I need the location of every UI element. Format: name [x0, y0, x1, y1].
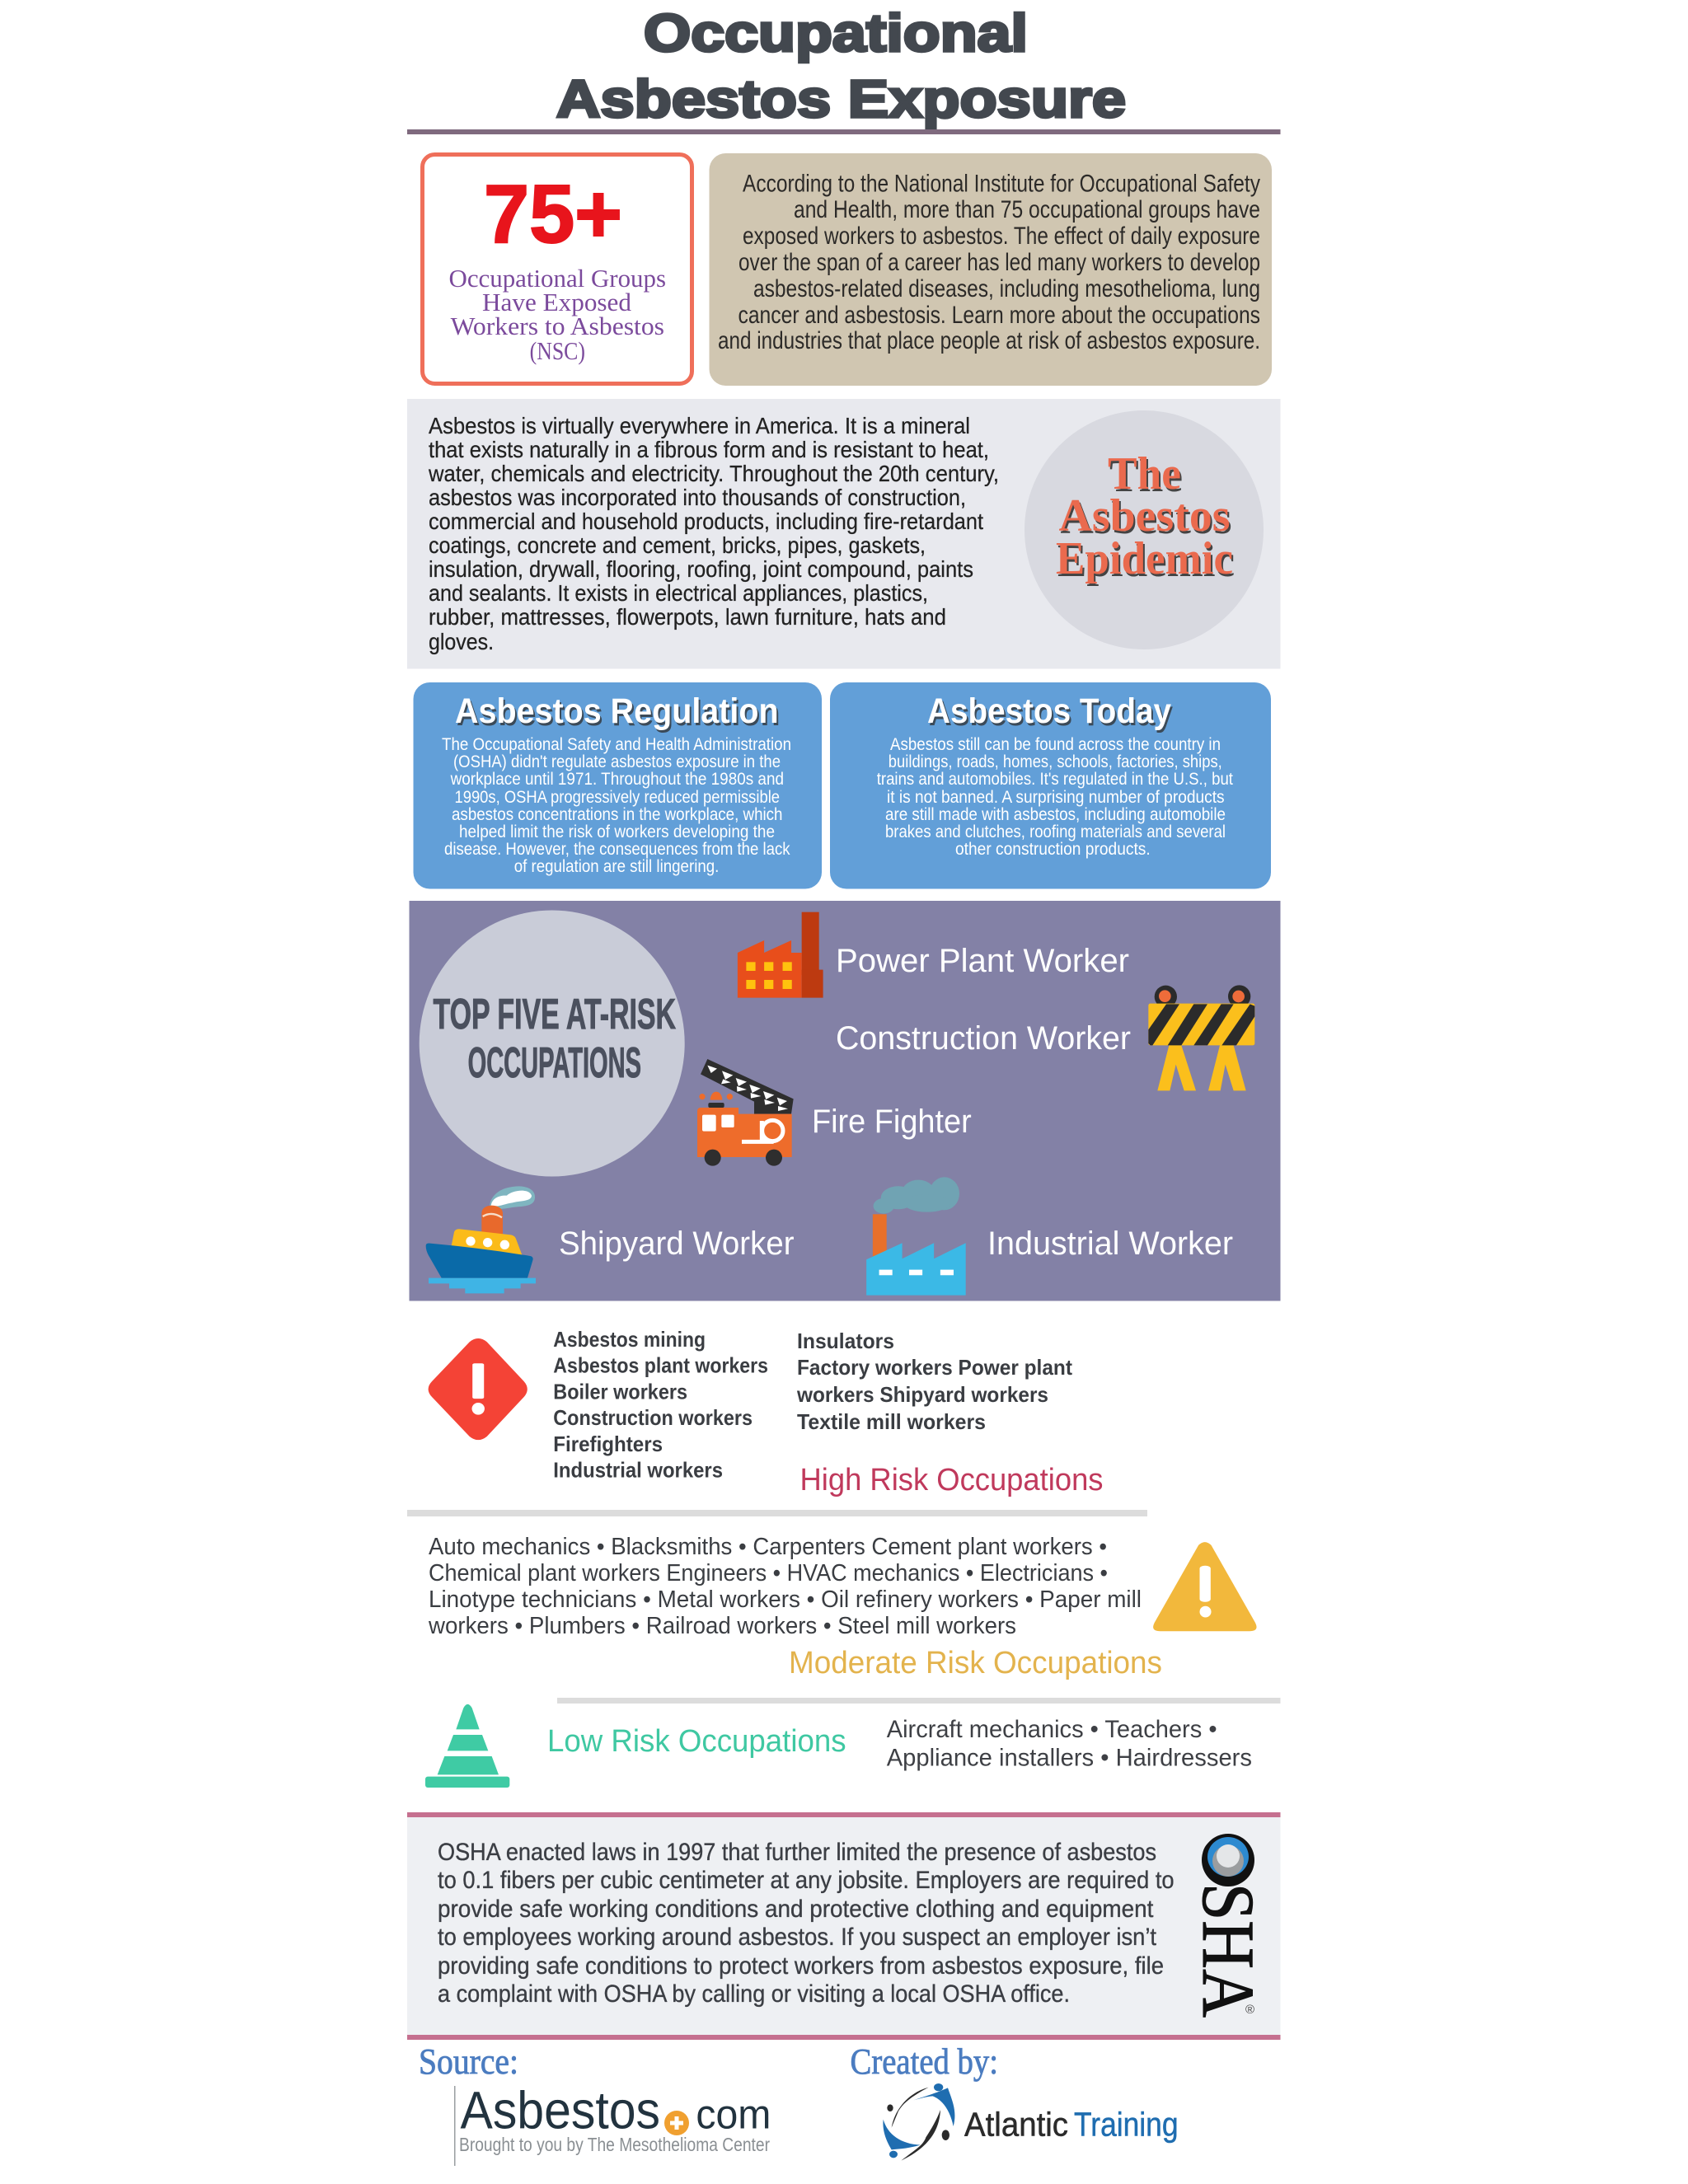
today heading: Asbestos Today	[927, 691, 1171, 731]
moderate risk heading: Moderate Risk Occupations	[789, 1646, 1162, 1680]
panel: intro text: asbestos-related diseases, including mesothelioma, lung	[753, 275, 1260, 302]
panel: intro text: and industries that place people at risk of asbestos exposure.	[718, 327, 1260, 354]
moderate risk list: Linotype technicians • Metal workers • Oil refinery workers • Paper mill	[429, 1586, 1142, 1613]
icon: power plant factory	[738, 912, 823, 998]
high risk list, left column: Boiler workers	[553, 1380, 687, 1404]
icon: swirl of figures	[883, 2083, 954, 2161]
high risk heading: High Risk Occupations	[799, 1463, 1103, 1497]
today body: Asbestos still can be found across the country in	[890, 735, 1221, 754]
regulation body: disease. However, the consequences from the lack	[444, 840, 790, 859]
stat number: 75+	[484, 168, 622, 260]
logo: asbestos.com: com	[696, 2092, 771, 2138]
panel: intro text	[709, 153, 1272, 386]
osha body text: providing safe conditions to protect workers from asbestos exposure, file	[438, 1952, 1164, 1980]
regulation body: helped limit the risk of workers developing the	[459, 823, 775, 841]
epidemic body text	[428, 413, 999, 654]
epidemic body text: rubber, mattresses, flowerpots, lawn furniture, hats and	[429, 604, 946, 630]
epidemic heading circle: Asbestos	[1058, 490, 1230, 541]
epidemic body text: and sealants. It exists in electrical appliances, plastics,	[429, 580, 928, 606]
low risk list: Appliance installers • Hairdressers	[887, 1745, 1252, 1772]
osha body text: a complaint with OSHA by calling or visiting a local OSHA office.	[438, 1980, 1070, 2008]
title	[556, 3, 1126, 129]
regulation body: 1990s, OSHA progressively reduced permissible	[455, 788, 780, 807]
epidemic heading circle: The	[1108, 448, 1181, 499]
regulation body: asbestos concentrations in the workplace, which	[452, 805, 783, 824]
logo: asbestos.com: Asbestos	[460, 2081, 660, 2140]
epidemic body text: commercial and household products, including fire-retardant	[429, 509, 983, 534]
epidemic body text: coatings, concrete and cement, bricks, pipes, gaskets,	[429, 532, 926, 558]
panel: low risk occupations	[425, 1704, 1252, 1788]
logo: asbestos.com: Brought to you by The Mesothelioma Center	[459, 2134, 770, 2155]
logo: atlantic training: Training	[1074, 2106, 1179, 2144]
panel: the asbestos epidemic	[407, 399, 1281, 669]
panel: moderate risk occupations	[428, 1534, 1257, 1680]
regulation body: (OSHA) didn't regulate asbestos exposure in the	[453, 752, 781, 771]
low risk list: Aircraft mechanics • Teachers •	[887, 1716, 1217, 1743]
epidemic body text: Asbestos is virtually everywhere in America. It is a mineral	[429, 413, 970, 438]
regulation heading: Asbestos Regulation	[455, 691, 779, 731]
top five heading circle: OCCUPATIONS	[468, 1039, 641, 1087]
low risk list	[887, 1716, 1252, 1772]
icon: red warning diamond	[429, 1338, 528, 1440]
moderate risk list: Auto mechanics • Blacksmiths • Carpenters Cement plant workers •	[429, 1534, 1107, 1560]
panel: intro text: According to the National Institute for Occupational Safety	[743, 171, 1260, 198]
today body: trains and automobiles. It's regulated in the U.S., but	[877, 770, 1233, 789]
today body: other construction products.	[955, 840, 1151, 859]
regulation body: workplace until 1971. Throughout the 1980s and	[450, 770, 784, 789]
panel: intro text: cancer and asbestosis. Learn more about the occupations	[738, 302, 1260, 329]
high risk list, right column: Insulators	[797, 1329, 894, 1353]
panel: intro text: exposed workers to asbestos. The effect of daily exposure	[743, 223, 1260, 250]
osha body text	[438, 1839, 1175, 2008]
moderate risk list: workers • Plumbers • Railroad workers • Steel mill workers	[428, 1613, 1016, 1639]
source heading: Source:	[419, 2041, 518, 2082]
icon: fire truck	[697, 1059, 794, 1166]
panel: osha note	[407, 1812, 1281, 2040]
high risk list, left column	[553, 1327, 768, 1483]
icon: osha logo: ®	[1245, 2003, 1254, 2017]
icon: industrial factory	[866, 1177, 966, 1296]
high risk list, left column: Industrial workers	[553, 1458, 723, 1483]
osha body text: OSHA enacted laws in 1997 that further limited the presence of asbestos	[438, 1839, 1156, 1866]
epidemic body text: water, chemicals and electricity. Throughout the 20th century,	[428, 461, 999, 486]
moderate risk list: Chemical plant workers Engineers • HVAC mechanics • Electricians •	[429, 1560, 1108, 1586]
epidemic body text: asbestos was incorporated into thousands of construction,	[429, 485, 966, 510]
panel: intro text: over the span of a career has led many workers to develop	[738, 249, 1260, 276]
epidemic body text: insulation, drywall, flooring, roofing, joint compound, paints	[429, 556, 973, 582]
occupation labels: Power Plant Worker	[836, 943, 1129, 979]
today body: buildings, roads, homes, schools, factories, ships,	[889, 752, 1222, 771]
low risk heading: Low Risk Occupations	[547, 1724, 846, 1759]
high risk list, left column: Firefighters	[553, 1432, 663, 1456]
logo: atlantic training: Atlantic	[964, 2106, 1068, 2144]
high risk list, left column: Construction workers	[553, 1405, 753, 1430]
icon: osha logo: OSHA	[1187, 1835, 1268, 2018]
occupation labels: Industrial Worker	[987, 1226, 1233, 1262]
panel: 75+ stat	[422, 155, 692, 384]
panel: asbestos today	[830, 682, 1271, 888]
high risk list, right column	[796, 1329, 1072, 1434]
icon: construction barricade	[1148, 985, 1254, 1090]
regulation body: The Occupational Safety and Health Administration	[442, 735, 791, 754]
epidemic body text: that exists naturally in a fibrous form and is resistant to heat,	[429, 437, 989, 462]
high risk list, right column: Textile mill workers	[797, 1409, 986, 1434]
high risk list, left column: Asbestos plant workers	[553, 1353, 768, 1378]
high risk list, right column: workers Shipyard workers	[796, 1382, 1048, 1407]
stat caption: (NSC)	[530, 336, 585, 365]
logo: asbestos.com	[454, 2081, 771, 2166]
today body: are still made with asbestos, including automobile	[885, 805, 1226, 824]
title: Occupational	[644, 3, 1028, 63]
icon: traffic cone	[425, 1704, 509, 1788]
epidemic body text: gloves.	[429, 629, 494, 654]
osha body text: provide safe working conditions and protective clothing and equipment	[438, 1896, 1154, 1923]
occupation labels	[559, 943, 1233, 1262]
regulation body	[442, 735, 791, 876]
epidemic heading circle: Epidemic	[1056, 533, 1233, 584]
osha body text: to 0.1 fibers per cubic centimeter at any jobsite. Employers are required to	[438, 1867, 1175, 1894]
stat caption: Have Exposed	[482, 288, 631, 316]
panel: asbestos regulation	[414, 682, 822, 888]
panel: intro text: and Health, more than 75 occupational groups have	[794, 196, 1260, 223]
today body: it is not banned. A surprising number of products	[887, 788, 1225, 807]
created by heading: Created by:	[851, 2041, 998, 2082]
logo: atlantic training	[883, 2083, 1179, 2161]
panel: high risk occupations	[429, 1327, 1103, 1497]
stat caption: Occupational Groups	[448, 264, 666, 293]
high risk list, right column: Factory workers Power plant	[797, 1355, 1072, 1380]
today body	[877, 735, 1233, 859]
stat caption: Workers to Asbestos	[451, 312, 664, 340]
occupation labels: Shipyard Worker	[559, 1226, 795, 1262]
title: Asbestos Exposure	[556, 69, 1126, 129]
osha body text: to employees working around asbestos. If you suspect an employer isn’t	[438, 1924, 1157, 1951]
today body: brakes and clutches, roofing materials and several	[885, 823, 1226, 841]
high risk list, left column: Asbestos mining	[553, 1327, 706, 1352]
epidemic heading circle	[1025, 410, 1264, 649]
regulation body: of regulation are still lingering.	[514, 857, 719, 876]
occupation labels: Fire Fighter	[812, 1104, 972, 1140]
top five heading circle: TOP FIVE AT-RISK	[434, 991, 676, 1038]
icon: ship	[426, 1186, 536, 1293]
stat caption	[448, 264, 666, 365]
moderate risk list	[428, 1534, 1142, 1639]
icon: yellow warning triangle	[1153, 1542, 1257, 1631]
panel: top five occupations	[409, 901, 1281, 1301]
top five heading circle	[420, 910, 685, 1177]
occupation labels: Construction Worker	[836, 1020, 1131, 1057]
